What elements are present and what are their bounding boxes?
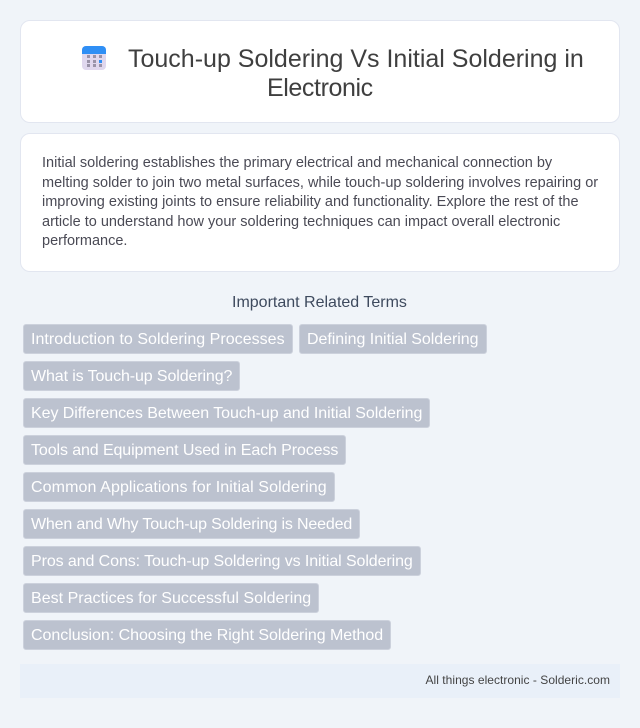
- intro paragraph: melting solder to join two metal surfaces, while touch-up soldering involves repairing or: [42, 174, 598, 190]
- icon: calendar: [82, 46, 106, 70]
- tag: [23, 509, 360, 539]
- intro paragraph: [42, 155, 598, 249]
- tag: What is Touch-up Soldering?: [31, 368, 232, 385]
- tag: [23, 435, 346, 465]
- tag: Pros and Cons: Touch-up Soldering vs Initial Soldering: [31, 553, 413, 570]
- tag: Key Differences Between Touch-up and Initial Soldering: [31, 405, 422, 422]
- tag: [23, 361, 240, 391]
- tag: Tools and Equipment Used in Each Process: [31, 442, 338, 459]
- intro paragraph: Initial soldering establishes the primary electrical and mechanical connection by: [42, 155, 552, 171]
- intro paragraph: improving existing joints to ensure reliability and functionality. Explore the rest of the: [42, 194, 579, 210]
- intro paragraph: article to understand how your soldering techniques can impact overall electronic: [42, 214, 560, 230]
- tag: [299, 324, 487, 354]
- title line one: Touch-up Soldering Vs Initial Soldering in: [128, 45, 584, 73]
- tag: When and Why Touch-up Soldering is Needed: [31, 516, 352, 533]
- panel: intro card: [20, 133, 620, 272]
- tag: [23, 583, 319, 613]
- title line two: Electronic: [267, 74, 373, 102]
- tag: Common Applications for Initial Soldering: [31, 479, 327, 496]
- tag: Introduction to Soldering Processes: [31, 331, 285, 348]
- footer bar: [20, 664, 620, 698]
- footer text: All things electronic - Solderic.com: [426, 673, 610, 687]
- tag: Conclusion: Choosing the Right Soldering Method: [31, 627, 383, 644]
- tag: [23, 472, 335, 502]
- tag: [23, 620, 391, 650]
- heading: important related terms: Important Related Terms: [232, 294, 407, 311]
- tag: Best Practices for Successful Soldering: [31, 590, 311, 607]
- intro paragraph: performance.: [42, 233, 127, 249]
- tag: Defining Initial Soldering: [307, 331, 479, 348]
- panel: title card: [20, 20, 620, 123]
- tag: [23, 398, 430, 428]
- tag: [23, 324, 293, 354]
- tag: [23, 546, 421, 576]
